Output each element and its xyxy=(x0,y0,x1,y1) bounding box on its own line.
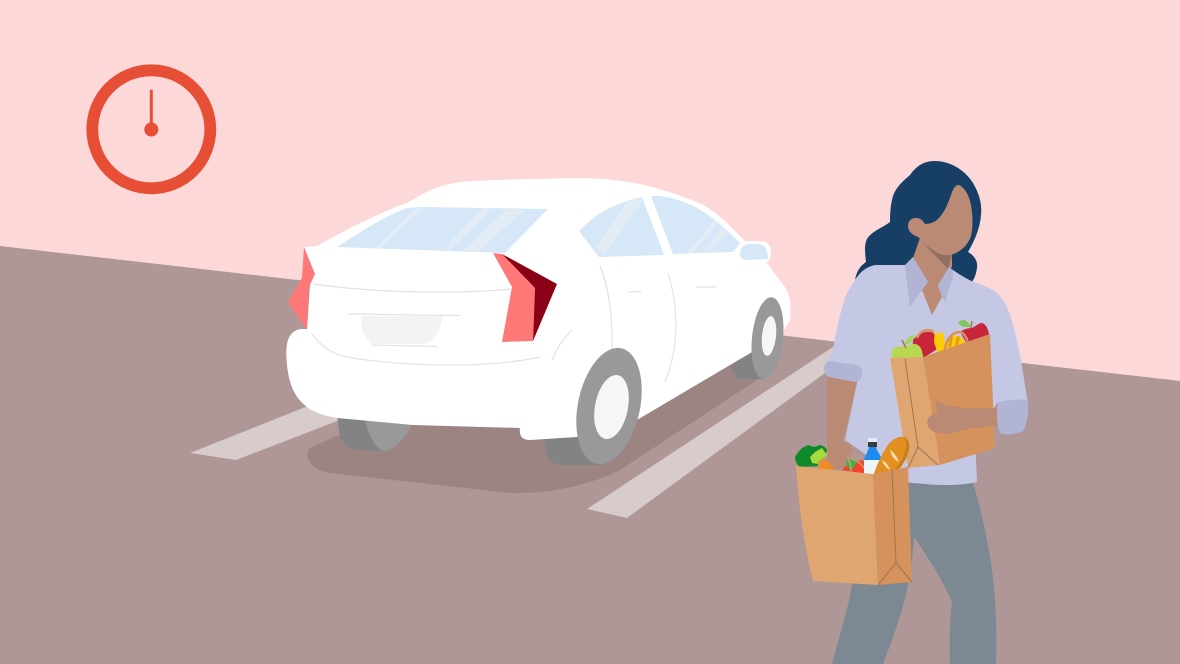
neck shadow xyxy=(923,243,952,269)
broccoli xyxy=(795,445,827,467)
icon: clock xyxy=(92,70,210,188)
grocery bag: lower xyxy=(796,466,912,585)
apple: center red xyxy=(912,332,939,358)
parking lot ground xyxy=(0,246,1180,664)
wheel: front xyxy=(748,296,787,380)
arm: left skin xyxy=(827,372,858,470)
car xyxy=(286,178,790,470)
license plate recess xyxy=(361,316,443,344)
side mirror xyxy=(738,241,771,264)
tomato xyxy=(842,460,868,474)
wheel: rear left xyxy=(337,415,415,451)
neck and chest xyxy=(913,238,952,315)
bag handles: upper xyxy=(917,330,968,350)
sleeve cuff: left xyxy=(824,361,862,382)
tomato leaf xyxy=(845,458,857,470)
fruit in upper bag xyxy=(892,320,989,358)
hand gripping handle xyxy=(828,430,853,470)
groceries in lower bag xyxy=(795,430,909,474)
bottle xyxy=(864,438,882,474)
car body xyxy=(286,178,790,440)
apple: right red xyxy=(960,323,989,344)
sleeve cuff: right xyxy=(997,400,1028,434)
rear window xyxy=(337,207,548,253)
apple stem: green xyxy=(902,340,906,348)
apple stem: right xyxy=(971,321,972,328)
hair xyxy=(855,161,981,282)
banana xyxy=(934,331,947,353)
wheel: rear right xyxy=(566,342,652,470)
bag handles: lower xyxy=(818,457,864,471)
car shadow on ground xyxy=(307,345,770,493)
wheel shadow side: rear right xyxy=(543,435,602,465)
tail light: right xyxy=(493,253,557,342)
body panel lines xyxy=(312,266,716,382)
broccoli highlight xyxy=(810,448,827,464)
apple leaf: right xyxy=(958,320,971,327)
hand and forearm on bag xyxy=(927,400,998,434)
wheel shadow side: front xyxy=(730,350,762,379)
pants xyxy=(832,480,996,664)
side window: rear door xyxy=(579,197,664,257)
carrot xyxy=(818,458,836,470)
shirt xyxy=(826,265,1028,485)
parking line: right xyxy=(587,345,840,518)
apple: green xyxy=(892,344,923,358)
striped fruit xyxy=(943,335,966,349)
parking line: left xyxy=(190,402,345,460)
person carrying groceries xyxy=(795,161,1028,664)
side window: front door xyxy=(651,196,740,254)
face xyxy=(908,185,972,255)
shaded gap between arm and torso xyxy=(842,340,866,442)
shirt collar xyxy=(905,257,953,307)
tail light: left xyxy=(288,247,315,330)
grocery bag: upper xyxy=(890,334,995,468)
apple leaf: green xyxy=(905,335,915,345)
baguette xyxy=(874,437,909,474)
